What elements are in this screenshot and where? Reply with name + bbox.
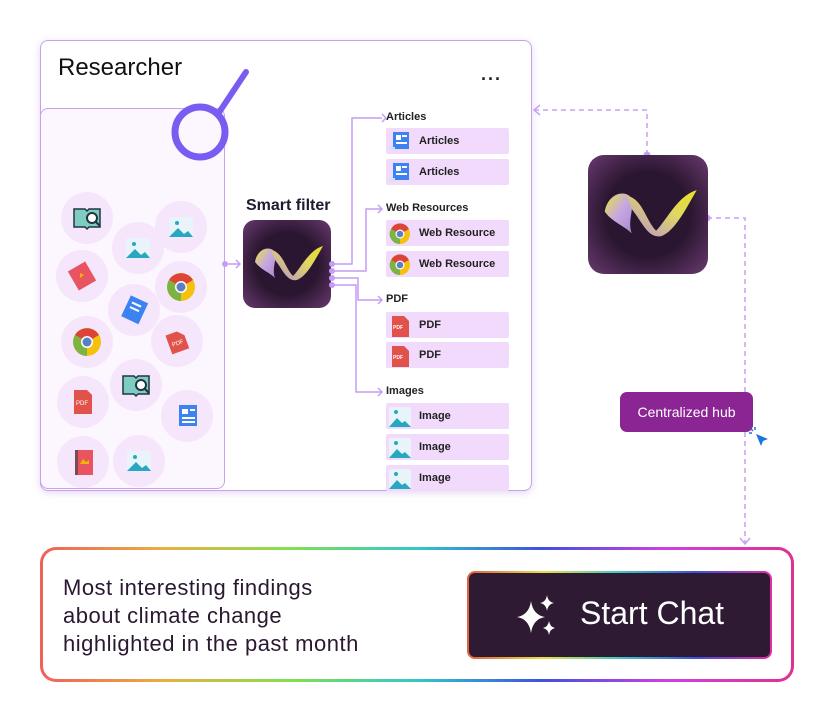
- panel: researcher: [40, 40, 532, 491]
- callout: centralized hub: Centralized hub: [637, 404, 736, 420]
- connectors: filter to categories: [329, 114, 387, 396]
- icon: app logo large: [588, 155, 708, 274]
- icon: cursor: [749, 427, 768, 446]
- list: web resources: [386, 202, 509, 277]
- text: Web Resource: [419, 258, 495, 270]
- icon: image: [155, 201, 207, 253]
- icon: red book: [57, 436, 109, 488]
- icon: book search: [110, 359, 162, 411]
- icon: pdf: PDF: [76, 401, 88, 407]
- text: PDF: [419, 349, 441, 361]
- text: prompt: [63, 575, 359, 656]
- panel: sources: [40, 108, 225, 489]
- text: Web Resource: [419, 227, 495, 239]
- button: start chat: [467, 571, 772, 659]
- callout: centralized hub: [620, 392, 753, 432]
- text: PDF: [393, 325, 403, 331]
- icon: article: [108, 284, 160, 336]
- dashed connectors: [533, 104, 750, 545]
- text: Image: [419, 441, 451, 453]
- label: smart filter: Smart filter: [246, 197, 330, 214]
- icon: red book: [56, 250, 108, 302]
- list: images: [386, 385, 509, 491]
- text: Image: [419, 472, 451, 484]
- text: PDF: [386, 293, 408, 305]
- text: prompt: Most interesting findings: [63, 575, 313, 600]
- text: Articles: [419, 135, 459, 147]
- text: Articles: [419, 166, 459, 178]
- panel: prompt: [40, 547, 794, 682]
- text: PDF: [419, 319, 441, 331]
- icon: article: [161, 390, 213, 442]
- icon: image: [112, 222, 164, 274]
- icon: sparkles: [517, 595, 555, 635]
- text: PDF: [393, 355, 403, 361]
- list: pdf: [386, 293, 509, 368]
- icon: pdf: [151, 315, 203, 367]
- icon: image: [113, 435, 165, 487]
- text: prompt: highlighted in the past month: [63, 631, 359, 656]
- arrow: sources to filter: [222, 260, 241, 268]
- icon: more dots: ···: [481, 69, 502, 89]
- icon: pdf: PDF: [171, 339, 185, 349]
- list: articles: [386, 111, 509, 185]
- text: Images: [386, 385, 424, 397]
- text: Articles: [386, 111, 426, 123]
- text: Web Resources: [386, 202, 468, 214]
- text: Image: [419, 410, 451, 422]
- label: start chat: Start Chat: [580, 595, 724, 631]
- icon: magnifier: [172, 69, 249, 160]
- icon: chrome: [61, 316, 113, 368]
- icon: book search: [61, 192, 113, 244]
- title: Researcher: [58, 54, 182, 81]
- icon: smart filter logo: [243, 220, 331, 308]
- text: prompt: about climate change: [63, 603, 282, 628]
- icon: chrome: [155, 261, 207, 313]
- icon: pdf: [57, 376, 109, 428]
